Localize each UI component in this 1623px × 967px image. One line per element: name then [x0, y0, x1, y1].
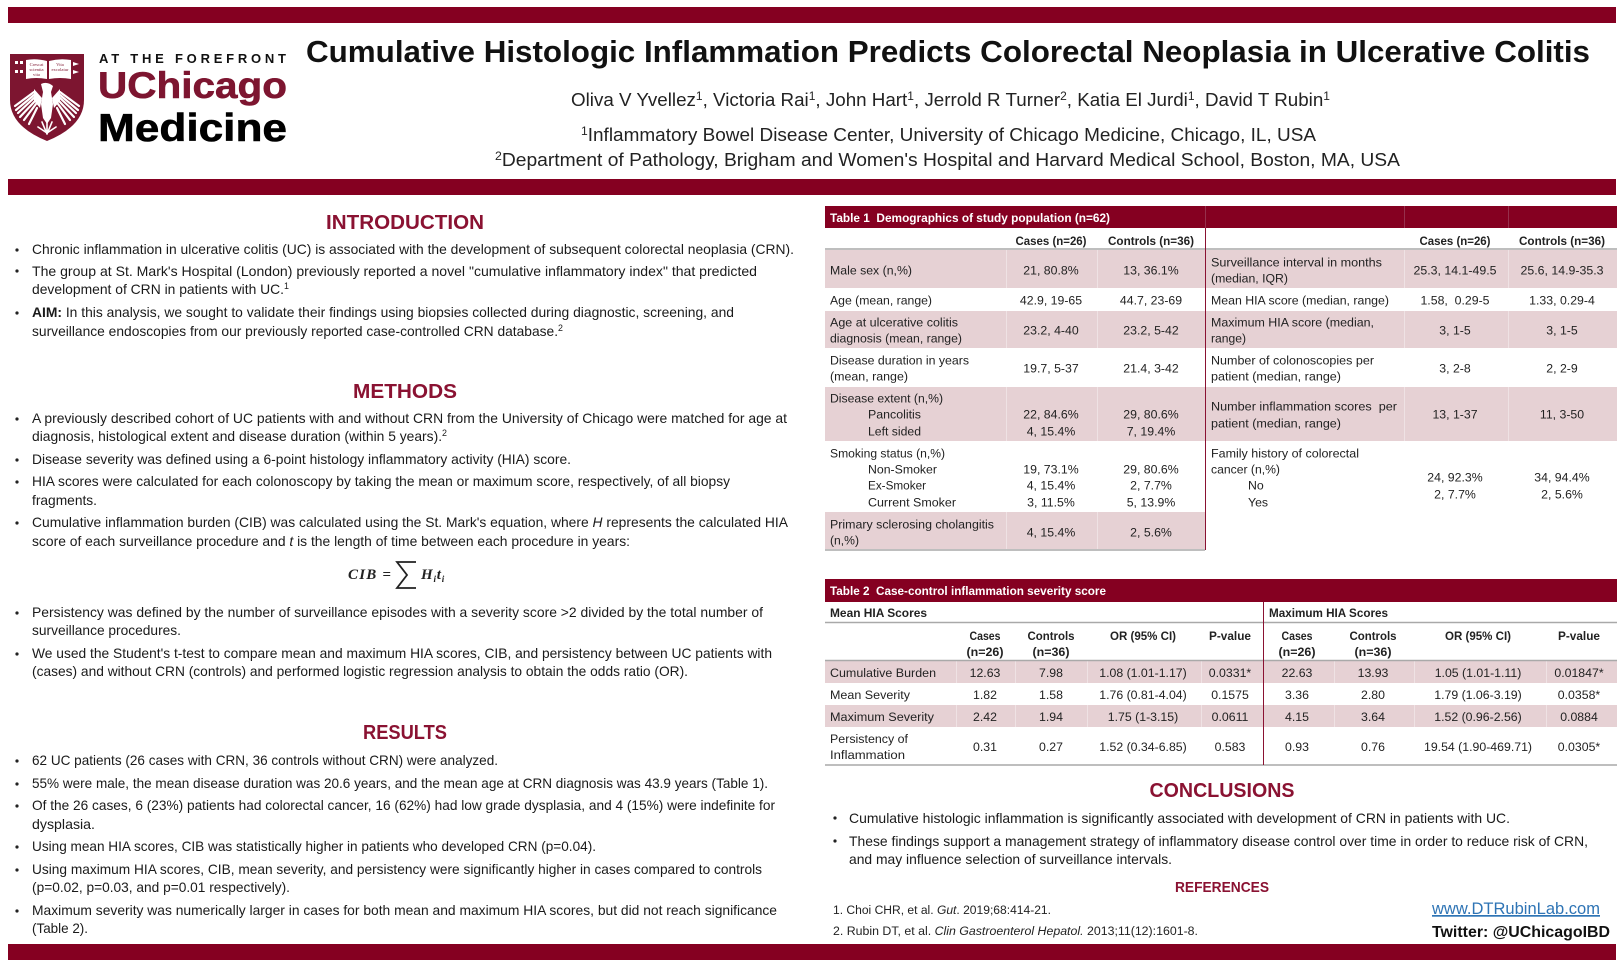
top banner bar [8, 7, 1616, 23]
bullet list: results: Using mean HIA scores, CIB was statistically higher in patients who developed CRN (p=0.04). [32, 838, 596, 854]
bullet list: introduction: 2 [558, 323, 563, 333]
table 1 left rows: 29, 80.6% [1123, 407, 1179, 421]
table 1 left rows: 5, 13.9% [1127, 495, 1175, 509]
icon: university shield: Vita [56, 62, 64, 67]
table 1 right rows: patient (median, range) [1211, 369, 1341, 383]
table 1 left rows: 19.7, 5-37 [1023, 361, 1079, 375]
authors: , Jerrold R Turner [914, 90, 1060, 110]
table 1 shaded rows [825, 228, 1617, 550]
table 2 data rows: Mean Severity [830, 688, 911, 702]
table 1 left rows: 44.7, 23-69 [1120, 293, 1182, 307]
table 2 data rows: 2.80 [1361, 688, 1385, 702]
heading: references: REFERENCES [1175, 879, 1269, 896]
table 2 data rows: 1.58 [1039, 688, 1063, 702]
table 2 data rows: 1.94 [1039, 710, 1063, 724]
table 1 right rows: 2, 5.6% [1541, 487, 1583, 501]
table 1 left rows: Male sex (n,%) [830, 263, 912, 277]
equation: cumulative inflammation burden [348, 562, 445, 588]
table 1 left rows: 22, 84.6% [1023, 407, 1079, 421]
authors: 1 [907, 91, 914, 103]
table 1 left rows: Age at ulcerative colitis [830, 315, 958, 329]
bullet list: introduction: development of CRN in patients with UC. [32, 281, 286, 297]
icon: university shield: vita [33, 72, 40, 77]
table 1 left rows: Disease extent (n,%) [830, 391, 943, 405]
logo wordmark UChicago: UChicago [98, 65, 287, 106]
panel: references [833, 879, 1269, 938]
logo tagline: AT THE FOREFRONT [99, 51, 286, 66]
table 2 data rows: 0.0358* [1558, 688, 1600, 702]
table 1 right rows: Yes [1248, 495, 1268, 509]
table 2 data rows: 19.54 (1.90-469.71) [1424, 740, 1532, 754]
icon: university shield: excolatur [51, 67, 69, 72]
table 2 data rows: 0.583 [1215, 740, 1246, 754]
table 1 right rows: 24, 92.3% [1427, 470, 1483, 484]
table 1 left rows: 2, 7.7% [1130, 478, 1172, 492]
table 1 right rows: 1.58, 0.29-5 [1420, 293, 1490, 307]
authors: 1 [809, 91, 815, 103]
heading: introduction: INTRODUCTION [326, 212, 484, 234]
bullet list: methods: 2 [442, 428, 447, 438]
equation: cumulative inflammation burden: i [433, 574, 437, 584]
table 2 data rows: 1.76 (0.81-4.04) [1099, 688, 1187, 702]
table 2 shaded rows and rules [825, 602, 1617, 765]
table 1 left rows: 23.2, 5-42 [1123, 323, 1179, 337]
table 1 right rows [1211, 255, 1604, 509]
table 1 right rows: patient (median, range) [1211, 416, 1341, 430]
table 1 left rows: 19, 73.1% [1023, 462, 1079, 476]
table 2 data rows: 0.76 [1361, 740, 1385, 754]
table 2 data rows: 1.82 [973, 688, 997, 702]
bullet list: introduction: The group at St. Mark's Hospital (London) previously reported a novel "cumulative inflammatory index" that predicted [32, 263, 757, 279]
table 1 left rows: 21.4, 3-42 [1123, 361, 1179, 375]
table 2 data rows: 1.75 (1-3.15) [1108, 710, 1178, 724]
equation: cumulative inflammation burden: t [437, 567, 442, 583]
table 2 data rows: 0.31 [973, 740, 997, 754]
table 1 left column headers [1016, 234, 1194, 248]
table 1 left rows: Age (mean, range) [830, 293, 932, 307]
table 2 column headers: (n=36) [1032, 645, 1070, 659]
table 1 left rows: Smoking status (n,%) [830, 446, 945, 460]
table 1 left rows [830, 263, 1182, 547]
table 1 right column headers [1420, 234, 1605, 248]
table 2 data rows: 0.0331* [1209, 666, 1251, 680]
table 2 data rows: 1.08 (1.01-1.17) [1099, 666, 1187, 680]
authors: 2 [1060, 91, 1067, 103]
bullet list: methods: HIA scores were calculated for each colonoscopy by taking the mean or maximum score, respectively, of all biopsy [32, 473, 730, 489]
bullet list: introduction: 1 [284, 281, 289, 291]
affiliations: 1 [581, 126, 588, 138]
authors: , Victoria Rai [703, 90, 809, 110]
table 2 group headers: Maximum HIA Scores [1269, 606, 1388, 620]
table 1 title bar [825, 206, 1617, 228]
bullet list: conclusions: These findings support a management strategy of inflammatory disease control over time in order to reduce risk of CRN, [849, 833, 1588, 849]
bullet list: results: dysplasia. [32, 816, 95, 832]
reference 2: 2. Rubin DT, et al. Clin Gastroenterol Hepatol. 2013;11(12):1601-8. [833, 924, 1198, 938]
table 2 data rows: 0.0305* [1558, 740, 1600, 754]
table 1 left rows: 4, 15.4% [1027, 478, 1075, 492]
table 1 left rows: Left sided [868, 424, 921, 438]
authors: , David T Rubin [1195, 90, 1323, 110]
table 2 data rows: 0.01847* [1554, 666, 1604, 680]
table 2 data rows: 12.63 [970, 666, 1001, 680]
table 2 column headers: Controls [1350, 629, 1397, 643]
bullet list: methods: score of each surveillance procedure and t is the length of time between each procedure in years: [32, 533, 630, 549]
table 1 right rows: 34, 94.4% [1534, 470, 1590, 484]
bullet list: results: (Table 2). [32, 920, 88, 936]
table 2 column headers: Cases [970, 629, 1001, 643]
contact link: www.DTRubinLab.com [1431, 899, 1600, 918]
table 1 left rows: 23.2, 4-40 [1023, 323, 1079, 337]
table 1 left rows: 3, 11.5% [1027, 495, 1075, 509]
bullet list: conclusions [833, 810, 1588, 867]
table 2 column headers: OR (95% CI) [1445, 629, 1511, 643]
bullet list: results [15, 752, 777, 936]
table 1 right rows: Maximum HIA score (median, [1211, 315, 1374, 329]
table 1 right column headers: Controls (n=36) [1519, 234, 1605, 248]
table 1 right rows: No [1248, 478, 1264, 492]
table 1 title bar: Table 1 Demographics of study population (n=62) [830, 211, 1110, 225]
heading: methods: METHODS [353, 381, 457, 403]
authors: 1 [1188, 91, 1195, 103]
table 1 left rows: 4, 15.4% [1027, 525, 1075, 539]
table 2 column headers [966, 629, 1600, 659]
table 2 data rows: Inflammation [830, 748, 905, 762]
table 1 right rows: 3, 2-8 [1439, 361, 1471, 375]
table 2 column headers: P-value [1558, 629, 1600, 643]
table 1 right rows: 13, 1-37 [1432, 407, 1478, 421]
header band bar [8, 179, 1616, 195]
table 2 data rows: Maximum Severity [830, 710, 935, 724]
table 1 left rows: Primary sclerosing cholangitis [830, 517, 994, 531]
table 1 right rows: Mean HIA score (median, range) [1211, 293, 1389, 307]
table 1 left rows: 42.9, 19-65 [1020, 293, 1082, 307]
table 2 data rows: 0.93 [1285, 740, 1309, 754]
authors: 1 [1323, 91, 1330, 103]
panel: conclusions [833, 780, 1588, 867]
table 1 left rows: Pancolitis [868, 407, 921, 421]
table 1 left rows: Current Smoker [868, 495, 956, 509]
table 2 data rows [830, 666, 1604, 762]
bullet list: methods: We used the Student's t-test to compare mean and maximum HIA scores, CIB, and persistency between UC patients with [32, 645, 772, 661]
table 2 data rows: 3.64 [1361, 710, 1385, 724]
bullet list: results: Using maximum HIA scores, CIB, mean severity, and persistency were significantly higher in cases compared to controls [32, 861, 762, 877]
table 1 right rows: 3, 1-5 [1546, 323, 1578, 337]
table 2 data rows: 0.0884 [1560, 710, 1598, 724]
bullet list: results: Of the 26 cases, 6 (23%) patients had colorectal cancer, 16 (62%) had low grade dysplasia, and 4 (15%) were indefinite for [32, 797, 775, 813]
table 2 column headers: OR (95% CI) [1110, 629, 1176, 643]
table 2 data rows: 4.15 [1285, 710, 1309, 724]
affiliations: Department of Pathology, Brigham and Women's Hospital and Harvard Medical School, Boston, MA, USA [502, 150, 1400, 170]
table 1 right rows: 1.33, 0.29-4 [1529, 293, 1595, 307]
title: Cumulative Histologic Inflammation Predicts Colorectal Neoplasia in Ulcerative Colitis [306, 34, 1590, 69]
equation: cumulative inflammation burden: i [442, 574, 445, 584]
table 2 column headers: Cases [1282, 629, 1313, 643]
bullet list: methods: Cumulative inflammation burden (CIB) was calculated using the St. Mark's equation, where H represents the calculated HIA [32, 514, 789, 530]
table 2 data rows: 13.93 [1358, 666, 1389, 680]
table 2 data rows: Persistency of [830, 732, 909, 746]
table 1 left rows: Disease duration in years [830, 353, 969, 367]
bullet list: introduction: surveillance endoscopies from our previously reported case-controlled CRN database. [32, 323, 566, 339]
bullet list: introduction [15, 241, 794, 339]
bullet list: methods [15, 410, 789, 679]
table 1 left rows: (mean, range) [830, 369, 908, 383]
table 2 data rows: 0.1575 [1211, 688, 1249, 702]
table 2 data rows: 1.05 (1.01-1.11) [1435, 666, 1521, 680]
icon: university shield: Crescat [30, 62, 44, 67]
bullet list: results: 55% were male, the mean disease duration was 20.6 years, and the mean age at CRN diagnosis was 43.9 years (Table 1). [32, 775, 768, 791]
table 2 data rows: 1.79 (1.06-3.19) [1434, 688, 1522, 702]
table 1 right rows: 2, 7.7% [1434, 487, 1476, 501]
authors: 1 [696, 91, 703, 103]
affiliations [495, 125, 1400, 170]
table 2 title bar: Table 2 Case-control inflammation severity score [830, 584, 1106, 598]
panel: introduction [15, 212, 794, 339]
bullet list: introduction: Chronic inflammation in ulcerative colitis (UC) is associated with the development of subsequent colorectal neoplasia (CRN). [32, 241, 794, 257]
bullet list: results: 62 UC patients (26 cases with CRN, 36 controls without CRN) were analyzed. [32, 752, 498, 768]
table 1 right rows: Surveillance interval in months [1211, 255, 1382, 269]
table 2 group headers [830, 606, 1388, 620]
table 1 left rows: Non-Smoker [868, 462, 937, 476]
table 2 column headers: Controls [1028, 629, 1075, 643]
bottom banner bar [8, 944, 1616, 960]
table 1 left rows: (n,%) [830, 533, 859, 547]
table 2 data rows: 7.98 [1039, 666, 1063, 680]
table 1 left rows: diagnosis (mean, range) [830, 331, 962, 345]
bullet list: methods: A previously described cohort of UC patients with and without CRN from the University of Chicago were matched for age at [32, 410, 787, 426]
equation: cumulative inflammation burden: H [421, 567, 433, 583]
bullet list: conclusions: Cumulative histologic inflammation is significantly associated with development of CRN in patients with UC. [849, 810, 1510, 826]
table 1 right rows: Number inflammation scores per [1211, 399, 1397, 413]
bullet list: methods: Disease severity was defined using a 6-point histology inflammatory activity (HIA) score. [32, 451, 571, 467]
icon: university shield [10, 54, 84, 141]
table 2 column headers: P-value [1209, 629, 1251, 643]
table 1 left rows: 4, 15.4% [1027, 424, 1075, 438]
panel: methods [15, 381, 789, 679]
table 2 data rows: 22.63 [1282, 666, 1313, 680]
table 1 left rows: 21, 80.8% [1023, 263, 1079, 277]
table 1 right column headers: Cases (n=26) [1420, 234, 1490, 248]
table 1 left column headers: Controls (n=36) [1108, 234, 1194, 248]
table 1 left rows: Ex-Smoker [868, 478, 926, 492]
table 1 right rows: 3, 1-5 [1439, 323, 1471, 337]
twitter handle: Twitter: @UChicagoIBD [1432, 924, 1610, 941]
authors: , Katia El Jurdi [1067, 90, 1188, 110]
table 1 right rows: range) [1211, 331, 1246, 345]
table 2 title bar [825, 579, 1617, 602]
affiliations: Inflammatory Bowel Disease Center, University of Chicago Medicine, Chicago, IL, USA [588, 125, 1316, 145]
authors: , John Hart [815, 90, 907, 110]
table 1 right rows: 25.6, 14.9-35.3 [1520, 263, 1604, 277]
logo wordmark Medicine: Medicine [98, 107, 287, 150]
table 2 column headers: (n=36) [1354, 645, 1392, 659]
table 2 column headers: (n=26) [966, 645, 1004, 659]
bullet list: results: (p=0.02, p=0.03, and p=0.01 respectively). [32, 879, 290, 895]
table 1 right rows: 2, 2-9 [1546, 361, 1578, 375]
bullet list: results: Maximum severity was numerically larger in cases for both mean and maximum HIA scores, but did not reach significance [32, 902, 777, 918]
bullet list: methods: diagnosis, histological extent and disease duration (within 5 years). [32, 428, 447, 444]
table 2 data rows: 0.27 [1039, 740, 1063, 754]
table 2 group headers: Mean HIA Scores [830, 606, 927, 620]
panel: results [15, 722, 777, 936]
table 1 left rows: 13, 36.1% [1123, 263, 1179, 277]
bullet list: conclusions: and may influence selection of surveillance intervals. [849, 851, 1172, 867]
bullet list: methods: (cases) and without CRN (controls) and performed logistic regression analysis to obtain the odds ratio (OR). [32, 663, 688, 679]
table 2 data rows: 0.0611 [1212, 710, 1249, 724]
affiliations: 2 [495, 151, 502, 163]
table 2 data rows: 1.52 (0.96-2.56) [1434, 710, 1522, 724]
bullet list: introduction: AIM: In this analysis, we sought to validate their findings using biopsies collected during diagnostic, screening, and [32, 304, 734, 320]
table 1 right rows: Number of colonoscopies per [1211, 353, 1374, 367]
table 2 data rows: Cumulative Burden [830, 666, 936, 680]
table 2 data rows: 1.52 (0.34-6.85) [1099, 740, 1187, 754]
table 1 left rows: 7, 19.4% [1127, 424, 1175, 438]
table 2: case-control severity [825, 579, 1617, 765]
table 1 right rows: (median, IQR) [1211, 271, 1288, 285]
table 1 right rows: cancer (n,%) [1211, 462, 1280, 476]
table 1 left column headers: Cases (n=26) [1016, 234, 1086, 248]
heading: results: RESULTS [363, 722, 447, 744]
table 2 data rows: 3.36 [1285, 688, 1309, 702]
logo: UChicago Medicine [10, 51, 287, 150]
equation: cumulative inflammation burden: CIB = [348, 567, 391, 583]
bullet list: methods: Persistency was defined by the number of surveillance episodes with a severity score >2 divided by the total number of [32, 604, 763, 620]
heading: conclusions: CONCLUSIONS [1150, 780, 1294, 802]
icon: university shield: scientia [29, 67, 44, 72]
table 1 right rows: Family history of colorectal [1211, 446, 1359, 460]
table 1 left rows: 29, 80.6% [1123, 462, 1179, 476]
table 1 right rows: 11, 3-50 [1540, 407, 1584, 421]
table 2 column headers: (n=26) [1278, 645, 1316, 659]
table 1 left rows: 2, 5.6% [1130, 525, 1172, 539]
table 2 data rows: 2.42 [973, 710, 997, 724]
bullet list: methods: fragments. [32, 492, 97, 508]
reference 1: 1. Choi CHR, et al. Gut. 2019;68:414-21. [833, 903, 1051, 917]
table 1: demographics [825, 206, 1617, 550]
bullet list: methods: surveillance procedures. [32, 622, 181, 638]
table 1 right rows: 25.3, 14.1-49.5 [1414, 263, 1497, 277]
authors: Oliva V Yvellez [571, 90, 691, 110]
